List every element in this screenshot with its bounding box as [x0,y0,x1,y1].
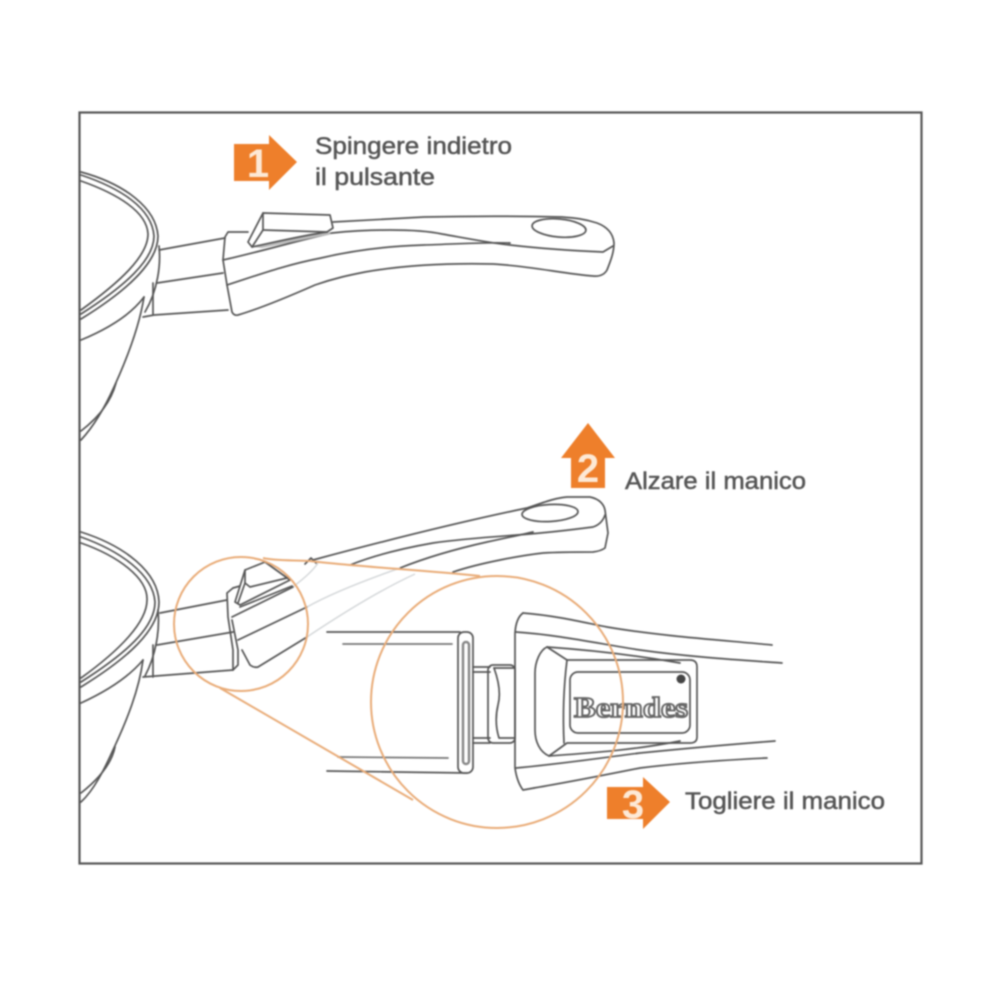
handle head top view [515,613,782,790]
zoom source circle [174,557,308,691]
arrow 2 [561,423,615,488]
step 1 marker [234,135,297,190]
pan body bottom [81,532,159,802]
line two: il pulsante [315,164,435,191]
badge dot [676,674,686,684]
pan body top [81,172,160,440]
handle 1 [143,216,614,317]
number 3: 3 [622,783,644,827]
step 1 label [315,133,512,191]
number 1: 1 [247,142,269,186]
motion ghost lines [294,563,415,637]
raised handle [232,497,608,667]
panel: step 2 pan with raised handle [81,497,608,802]
pan connector [327,632,490,773]
badge [570,672,690,733]
step 2 label: Alzare il manico [625,468,806,495]
frame [80,112,922,864]
arrow 3 [607,777,670,829]
step 2 marker [561,423,615,491]
magnifier callout [174,557,623,828]
brand name: Berndes [574,692,688,724]
handle button outline [535,647,697,756]
detail view: separated handle [327,613,782,790]
handle hole 1 [531,217,587,239]
zoom target circle [371,576,623,828]
panel: step 1 pan with handle [81,172,614,440]
step 3 marker [607,777,670,829]
handle hole 2 [522,503,578,523]
link [488,665,515,743]
arrow 1 [234,135,297,190]
step 3 label: Togliere il manico [685,788,885,815]
lower connector [220,688,413,800]
slide button 1 [248,213,333,247]
raised handle button [235,562,292,607]
handle stub 2 [143,586,240,677]
number 2: 2 [577,447,599,491]
upper connector [263,558,480,576]
button shadow [252,232,332,248]
line one: Spingere indietro [315,133,512,160]
